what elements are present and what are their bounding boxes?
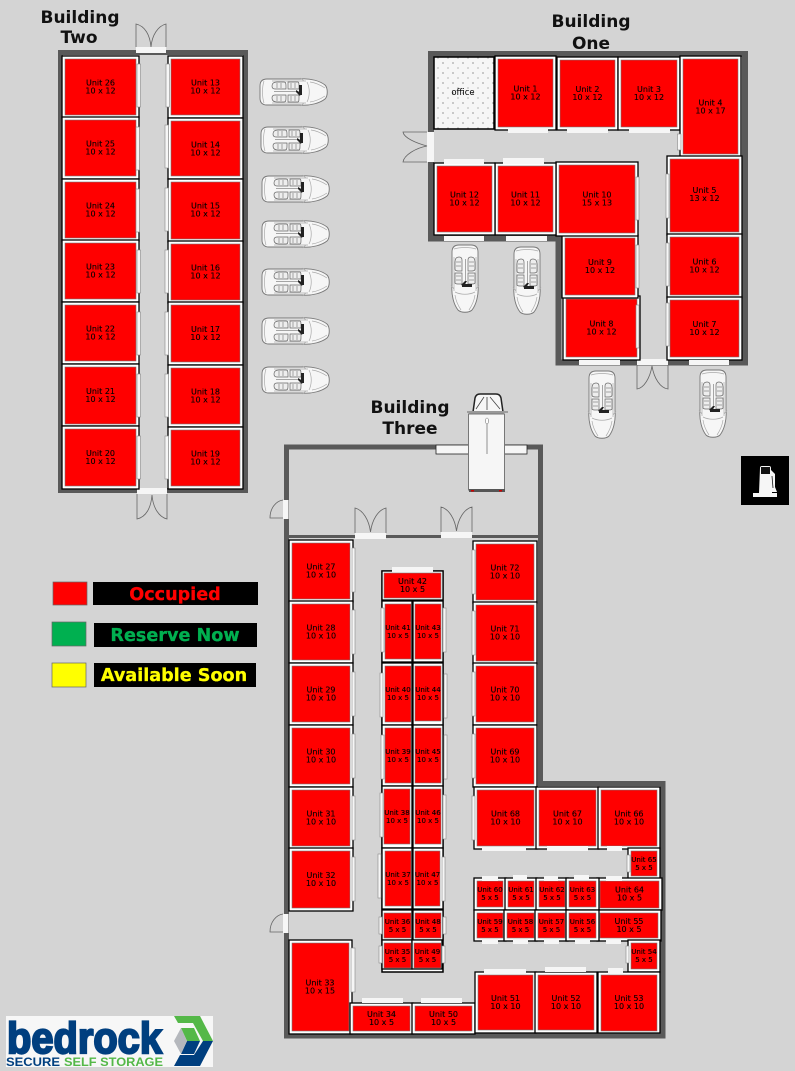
unit 13: Unit 13	[191, 78, 220, 88]
legend: available soon	[52, 663, 256, 687]
unit 48: 5 x 5	[419, 926, 437, 934]
unit 24	[62, 179, 139, 241]
unit 21: Unit 21	[86, 387, 115, 396]
unit 26: 10 x 12	[85, 86, 116, 96]
unit 55: 10 x 5	[616, 925, 642, 934]
unit 31	[289, 787, 353, 849]
unit 63: Unit 63	[570, 886, 595, 894]
parked cars beside building two	[260, 78, 329, 394]
south-west single door	[270, 914, 288, 933]
unit 68: 10 x 10	[490, 818, 521, 826]
unit 46: 10 x 5	[417, 817, 439, 825]
unit 2: 10 x 12	[572, 93, 603, 102]
unit 26	[62, 56, 139, 118]
unit 12: 10 x 12	[449, 198, 480, 208]
unit 37: 10 x 5	[387, 879, 409, 887]
unit 53: 10 x 10	[614, 1002, 644, 1011]
unit 48: Unit 48	[415, 918, 441, 926]
unit 9: 10 x 12	[585, 266, 615, 275]
unit 33: Unit 33	[305, 978, 335, 988]
unit 10	[556, 162, 638, 236]
unit 13	[168, 56, 243, 118]
unit 43	[413, 601, 443, 662]
unit 70	[473, 663, 537, 725]
unit 1: 10 x 12	[510, 92, 541, 102]
unit 25	[62, 117, 139, 179]
vehicle door frame	[436, 445, 527, 454]
unit 36: Unit 36	[385, 918, 411, 926]
heading: building two: Two	[60, 28, 98, 48]
unit 33: 10 x 15	[305, 986, 335, 996]
unit 45: 10 x 5	[417, 756, 439, 764]
unit 9: Unit 9	[588, 258, 612, 267]
unit 11: Unit 11	[511, 190, 540, 200]
unit 66: Unit 66	[614, 810, 644, 818]
unit 56: 5 x 5	[574, 926, 591, 934]
unit 18	[168, 365, 243, 427]
unit 39: 10 x 5	[387, 756, 409, 764]
unit 71	[473, 602, 537, 664]
unit 59: 5 x 5	[481, 926, 499, 934]
unit 60	[474, 878, 506, 910]
unit 21: 10 x 12	[85, 395, 116, 404]
unit 72	[473, 541, 537, 603]
heading: building three	[371, 398, 449, 439]
panel: building three	[270, 394, 663, 1036]
unit 46: Unit 46	[415, 809, 441, 817]
unit 61: Unit 61	[508, 886, 534, 894]
unit 43: Unit 43	[415, 624, 441, 632]
heading: building two: Building	[41, 8, 119, 28]
unit 31: 10 x 10	[306, 818, 336, 826]
north-west single door	[270, 500, 288, 519]
unit 17	[168, 302, 243, 365]
unit 68	[474, 787, 537, 849]
unit 37: Unit 37	[385, 871, 411, 879]
unit 69: Unit 69	[490, 748, 520, 756]
unit 28: 10 x 10	[306, 632, 336, 640]
unit 10: Unit 10	[582, 190, 612, 200]
building three walls	[286, 447, 663, 1036]
moving truck	[467, 394, 508, 492]
unit 59: Unit 59	[477, 918, 503, 926]
unit 53	[598, 972, 660, 1033]
unit 38: 10 x 5	[386, 817, 408, 825]
unit 65: 5 x 5	[635, 864, 653, 872]
unit 6	[667, 234, 742, 298]
unit 38	[382, 786, 412, 848]
unit 20: Unit 20	[86, 449, 115, 458]
unit 48	[413, 910, 443, 940]
unit 63: 5 x 5	[574, 894, 591, 902]
unit 36: 5 x 5	[389, 926, 406, 934]
unit 42	[382, 571, 443, 600]
unit 8	[563, 296, 640, 360]
unit 50: 10 x 5	[431, 1018, 456, 1027]
unit 23: Unit 23	[86, 262, 115, 272]
south double door	[637, 359, 668, 389]
unit 54	[628, 940, 660, 972]
unit 72: Unit 72	[490, 564, 520, 572]
unit 2: Unit 2	[576, 85, 599, 94]
unit 8: Unit 8	[590, 320, 613, 328]
unit 47: 10 x 5	[417, 879, 438, 887]
unit 60: 5 x 5	[481, 894, 499, 902]
unit 22: Unit 22	[86, 324, 115, 334]
unit 67	[536, 787, 599, 849]
icon: fuel pump	[741, 456, 789, 505]
unit 47	[413, 848, 443, 909]
unit 34: 10 x 5	[369, 1018, 394, 1027]
unit 71: Unit 71	[490, 624, 520, 634]
parked cars around building one	[451, 245, 727, 438]
unit 50	[412, 1003, 475, 1034]
unit 1: Unit 1	[514, 84, 537, 94]
unit 1	[495, 56, 556, 130]
unit 5: Unit 5	[693, 186, 716, 195]
unit 43: 10 x 5	[417, 632, 439, 640]
unit 30	[289, 725, 353, 787]
unit 51: 10 x 10	[490, 1002, 521, 1011]
unit 57: 5 x 5	[543, 926, 560, 934]
unit 52: Unit 52	[551, 994, 581, 1003]
unit 30: Unit 30	[306, 748, 336, 756]
unit 68: Unit 68	[491, 810, 520, 818]
unit 56	[566, 910, 599, 941]
unit 19: Unit 19	[191, 450, 220, 458]
double door two	[441, 507, 472, 538]
building two south double door	[137, 488, 167, 519]
unit 25: 10 x 12	[85, 148, 116, 156]
unit 54: 5 x 5	[635, 956, 653, 964]
unit 5	[667, 156, 742, 235]
unit 39: Unit 39	[385, 748, 411, 756]
unit 16	[168, 241, 243, 303]
heading: building one	[552, 12, 630, 54]
unit 34	[350, 1003, 413, 1034]
unit 49	[412, 940, 442, 969]
unit 55	[597, 910, 661, 941]
unit 29	[289, 663, 353, 725]
panel: building one	[403, 54, 745, 389]
unit 15: Unit 15	[191, 202, 220, 210]
double door one	[355, 508, 386, 539]
unit 13: 10 x 12	[190, 86, 221, 96]
office: office	[451, 88, 475, 98]
unit 61: 5 x 5	[512, 894, 530, 902]
unit 32: 10 x 10	[306, 879, 336, 888]
west double door	[403, 132, 434, 162]
unit 69: 10 x 10	[490, 756, 520, 764]
unit 64: 10 x 5	[617, 894, 642, 902]
building two roll-up doors	[136, 64, 170, 479]
unit 52	[535, 972, 597, 1033]
unit 45: Unit 45	[415, 748, 441, 756]
unit 42: Unit 42	[398, 577, 427, 586]
unit 6: 10 x 12	[689, 266, 720, 274]
unit 20: 10 x 12	[85, 457, 116, 466]
unit 26: Unit 26	[86, 78, 115, 88]
unit 35: Unit 35	[385, 948, 410, 956]
heading: building three: Building	[371, 398, 449, 418]
unit 60: Unit 60	[477, 886, 503, 894]
legend: available soon: Available Soon	[101, 666, 247, 686]
unit 6: Unit 6	[693, 258, 716, 266]
unit 18: 10 x 12	[190, 396, 221, 404]
unit 5: 13 x 12	[689, 194, 720, 203]
unit 10: 15 x 13	[582, 198, 612, 208]
unit 12	[434, 163, 495, 235]
unit 16: Unit 16	[191, 264, 220, 272]
unit 14: 10 x 12	[190, 148, 221, 158]
heading: building one: Building	[552, 12, 630, 32]
unit 57	[535, 910, 568, 941]
unit 4: Unit 4	[699, 98, 722, 108]
unit 32: Unit 32	[306, 871, 336, 880]
unit 20	[62, 426, 139, 489]
unit 7: 10 x 12	[689, 328, 720, 337]
unit 37	[382, 848, 412, 909]
unit 72: 10 x 10	[490, 572, 520, 580]
unit 57: Unit 57	[539, 918, 564, 926]
unit 54: Unit 54	[631, 948, 657, 956]
unit 2	[557, 57, 618, 130]
heading: building three: Three	[382, 419, 438, 439]
logo: bedrock secure self storage: SELF STORAGE	[64, 1057, 163, 1069]
unit 64	[597, 878, 662, 910]
interior wall	[289, 535, 543, 538]
unit 23	[62, 240, 139, 302]
unit 19	[168, 427, 243, 489]
unit 34: Unit 34	[367, 1010, 396, 1019]
unit 53: Unit 53	[614, 994, 644, 1003]
legend: occupied: Occupied	[129, 585, 221, 605]
legend: reserve now	[52, 622, 257, 647]
legend	[52, 582, 258, 687]
logo: bedrock secure self storage: bedrock	[7, 1014, 162, 1063]
unit 24: 10 x 12	[85, 210, 116, 218]
unit 69	[473, 725, 537, 787]
building two walls	[60, 52, 246, 490]
unit 11	[495, 163, 556, 235]
unit 40: Unit 40	[385, 686, 411, 694]
unit 52: 10 x 10	[551, 1002, 581, 1011]
unit 15	[168, 179, 243, 242]
unit 62: Unit 62	[539, 886, 565, 894]
unit 8: 10 x 12	[586, 328, 617, 336]
unit 3	[618, 57, 680, 130]
unit 4: 10 x 17	[695, 106, 726, 116]
unit 28: Unit 28	[306, 624, 336, 632]
centre block frame	[382, 571, 443, 972]
unit 16: 10 x 12	[190, 272, 221, 280]
unit 25: Unit 25	[86, 140, 115, 148]
unit 40	[382, 663, 412, 725]
unit 46	[413, 786, 443, 848]
building one door panels	[444, 128, 729, 365]
unit 65	[628, 848, 660, 879]
unit 29: 10 x 10	[306, 694, 336, 702]
unit 27	[289, 540, 353, 602]
unit 45	[413, 725, 443, 786]
unit 36	[382, 910, 412, 940]
unit 58: 5 x 5	[512, 926, 529, 934]
unit 23: 10 x 12	[85, 270, 116, 280]
unit 65: Unit 65	[631, 856, 657, 864]
unit 12: Unit 12	[450, 190, 479, 200]
unit 14	[168, 118, 243, 179]
unit 28	[289, 601, 353, 663]
unit 63	[566, 878, 599, 910]
unit 21	[62, 364, 139, 426]
unit 47: Unit 47	[415, 871, 440, 879]
unit 11: 10 x 12	[510, 198, 541, 208]
unit 29: Unit 29	[306, 686, 336, 694]
unit 44: 10 x 5	[417, 694, 439, 702]
building two north double door	[136, 24, 166, 53]
unit 39	[382, 725, 412, 786]
unit 51	[475, 972, 536, 1033]
building three door panels	[351, 548, 630, 1003]
unit 49: Unit 49	[415, 948, 440, 956]
unit 42: 10 x 5	[400, 585, 425, 594]
unit 9	[562, 235, 638, 298]
unit 70: Unit 70	[490, 686, 520, 694]
unit 32	[289, 848, 353, 911]
unit 62	[536, 878, 568, 910]
unit 33	[289, 940, 352, 1034]
unit 35: 5 x 5	[389, 956, 406, 964]
unit 62: 5 x 5	[543, 894, 561, 902]
unit 38: Unit 38	[384, 809, 410, 817]
unit 14: Unit 14	[191, 140, 220, 150]
unit 22: 10 x 12	[85, 332, 116, 342]
unit 30: 10 x 10	[306, 756, 336, 764]
unit 44	[413, 663, 443, 725]
unit 71: 10 x 10	[490, 632, 520, 642]
unit 59	[474, 910, 506, 941]
unit 27: 10 x 10	[306, 570, 336, 580]
unit 61	[505, 878, 537, 910]
unit 4	[680, 56, 741, 157]
unit 17: Unit 17	[191, 325, 220, 334]
legend: reserve now: Reserve Now	[110, 626, 240, 646]
unit 15: 10 x 12	[190, 210, 221, 218]
unit 56: Unit 56	[570, 918, 596, 926]
heading: building two	[41, 8, 119, 48]
building one walls	[431, 54, 745, 362]
unit 67: 10 x 10	[552, 818, 583, 826]
unit 24: Unit 24	[86, 202, 115, 210]
unit 41	[382, 601, 412, 662]
unit 58: Unit 58	[508, 918, 533, 926]
logo: bedrock secure self storage: SECURE	[6, 1057, 60, 1069]
unit 70: 10 x 10	[490, 694, 520, 702]
heading: building one: One	[572, 34, 610, 54]
unit 3: Unit 3	[637, 85, 661, 94]
unit 66: 10 x 10	[614, 818, 644, 826]
unit 7	[667, 297, 742, 360]
unit 27: Unit 27	[306, 562, 336, 572]
unit 18: Unit 18	[191, 388, 220, 396]
unit 66	[598, 787, 660, 849]
unit 22	[62, 302, 139, 364]
panel: building two	[60, 24, 246, 519]
office	[434, 57, 494, 129]
unit 51: Unit 51	[491, 994, 520, 1003]
unit 64: Unit 64	[615, 886, 644, 894]
unit 7: Unit 7	[693, 320, 716, 329]
unit 44: Unit 44	[415, 686, 441, 694]
unit 41: 10 x 5	[387, 632, 409, 640]
unit 50: Unit 50	[429, 1010, 458, 1019]
unit 3: 10 x 12	[634, 93, 664, 102]
unit 19: 10 x 12	[190, 458, 221, 466]
unit 41: Unit 41	[385, 624, 411, 632]
unit 67: Unit 67	[553, 810, 582, 818]
legend: occupied	[53, 582, 258, 605]
unit 58	[504, 910, 537, 941]
unit 35	[382, 940, 412, 969]
unit 49: 5 x 5	[419, 956, 436, 964]
unit 31: Unit 31	[306, 810, 336, 818]
unit 17: 10 x 12	[190, 333, 221, 342]
unit 40: 10 x 5	[387, 694, 409, 702]
unit 55: Unit 55	[614, 917, 644, 926]
